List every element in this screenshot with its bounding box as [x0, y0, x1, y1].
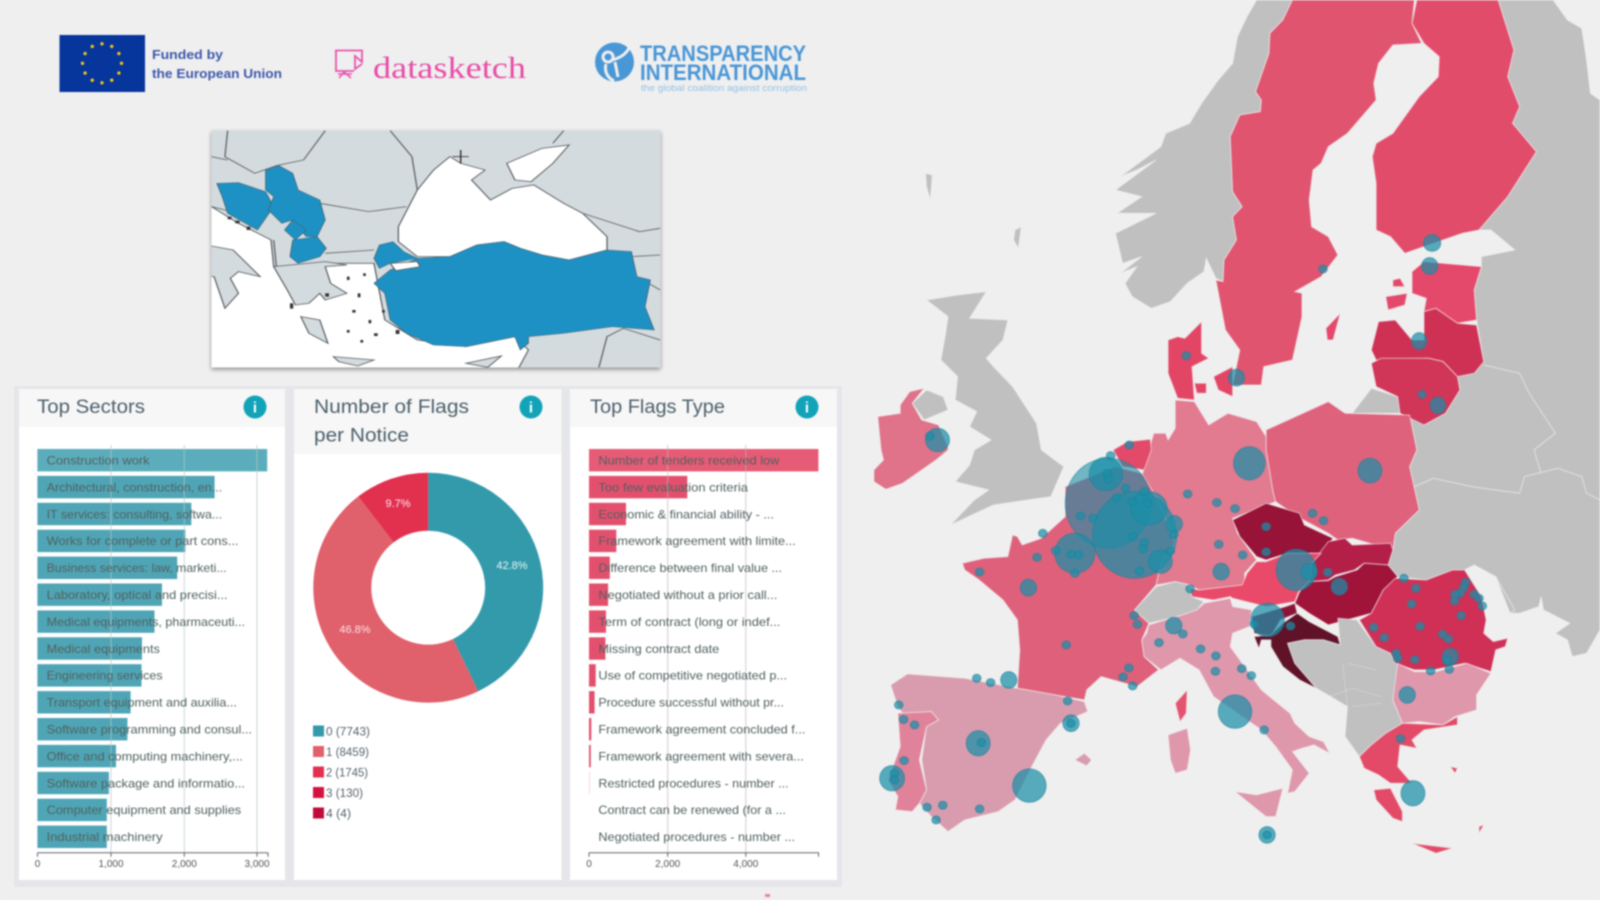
heading: Top Flags Type: Top Flags Type: [590, 397, 725, 418]
bubbles: notices by city, central and southern Europe: [880, 447, 1487, 843]
bar chart: top flag types: Too few evaluation criteria: [598, 480, 748, 494]
icon: info: [244, 396, 266, 418]
legend: flags per notice: 4 (4): [326, 808, 351, 820]
country: Bulgaria: [1393, 663, 1491, 725]
bar chart: top flag types: 4,000: [733, 859, 759, 870]
inset map: Western Balkans and Türkiye: [206, 130, 660, 370]
legend: flags per notice: 1 (8459): [326, 747, 369, 759]
icon: info: i: [529, 400, 533, 416]
dashboard panels background: [14, 386, 842, 887]
bar chart: top sectors: Computer equipment and supplies: [47, 803, 241, 817]
bar chart: top sectors: 2,000: [172, 859, 197, 870]
island: Corsica: [1175, 690, 1187, 722]
bar chart: top sectors: Engineering services: [47, 669, 163, 683]
non-EU countries in grey: [912, 0, 1600, 657]
bar chart: top flag types: Number of tenders received low: [598, 454, 780, 468]
logo: Transparency International: the global coalition against corruption: [641, 83, 807, 94]
map speck: Canary Islands fragment: [765, 894, 770, 897]
country: Austria: [1190, 553, 1321, 607]
bar chart: top sectors: Office and computing machinery,...: [47, 749, 243, 763]
islands: Balearics: [1075, 753, 1092, 766]
bar chart: top flag types: Framework agreement concluded f...: [598, 722, 805, 736]
donut chart: flags per notice: 42.8%: [496, 560, 528, 572]
panel: Top Sectors: [19, 389, 285, 880]
legend: flags per notice: 0 (7743): [326, 726, 370, 738]
country: Switzerland: [1135, 582, 1204, 623]
bar chart: top flag types: Framework agreement with limite...: [598, 534, 796, 548]
country: Denmark: [1168, 322, 1233, 400]
islands: Estonia and Sweden: [1326, 278, 1407, 340]
country: Czechia: [1233, 503, 1333, 560]
bar chart: top sectors: Industrial machinery: [47, 830, 163, 844]
logo: Transparency International: TRANSPARENCY: [640, 41, 806, 66]
legend: flags per notice: 3 (130): [326, 788, 363, 800]
bar chart: top flag types: Use of competitive negotiated p...: [598, 669, 787, 683]
country group: northern Europe: [874, 0, 1536, 590]
bar chart: top sectors: Transport equipment and auxilia...: [47, 696, 237, 710]
islands: Sicily and Sardinia: [1168, 728, 1283, 817]
country: Romania: [1359, 570, 1508, 672]
logo: Funded by the European Union: [60, 35, 282, 92]
bar chart: top flag types: Negotiated without a prior call...: [598, 588, 777, 602]
bar chart: top sectors: Laboratory, optical and precisi...: [47, 588, 228, 602]
bar chart: top sectors: Architectural, construction, en...: [47, 480, 222, 494]
country: Portugal: [888, 712, 938, 812]
bar chart: top flag types: [586, 445, 819, 870]
country: Slovenia: [1252, 603, 1297, 637]
country: Spain: [891, 674, 1088, 832]
bar chart: top sectors: Software package and informatio...: [47, 776, 245, 790]
country: Finland: [1372, 0, 1536, 253]
bar chart: top sectors: Construction work: [47, 454, 151, 468]
country: Ireland: [874, 388, 948, 489]
country group: southern and central Europe: [888, 467, 1508, 853]
country: Poland: [1266, 402, 1419, 550]
countries: Western Balkans: [1288, 618, 1402, 757]
country: Sweden: [1216, 0, 1422, 385]
logo: datasketch: datasketch: [373, 50, 527, 85]
bar chart: top flag types: 2,000: [655, 859, 681, 870]
bar chart: top sectors: Works for complete or part cons...: [47, 534, 238, 548]
bar chart: top flag types: Difference between final value ...: [598, 561, 782, 575]
heading: Top Sectors: Top Sectors: [37, 397, 145, 418]
bubbles: notices by city, northern Europe: [926, 235, 1445, 452]
legend: flags per notice: [313, 726, 370, 820]
country: Greece: [1359, 717, 1484, 853]
bar chart: top sectors: Medical equipments: [47, 642, 160, 656]
donut chart: flags per notice: 46.8%: [339, 624, 371, 636]
bar chart: top flag types: Negotiated procedures - number ...: [598, 830, 795, 844]
panel: Top Flags Type: [570, 389, 837, 880]
country: Latvia: [1371, 308, 1484, 377]
logo: Funded by the European Union: Funded by: [152, 47, 224, 62]
country: Germany: [1142, 400, 1276, 590]
choropleth map: Europe: [874, 0, 1600, 853]
logo: Transparency International: [595, 41, 807, 94]
donut chart: flags per notice: 9.7%: [385, 498, 411, 510]
country: Estonia: [1412, 262, 1481, 323]
country: Lithuania: [1371, 358, 1460, 425]
bar chart: top flag types: Term of contract (long or indef...: [598, 615, 780, 629]
heading: Number of Flags per Notice: [314, 397, 469, 446]
icon: info: i: [253, 400, 257, 416]
bar chart: top flag types: Procedure successful without pr...: [598, 696, 784, 710]
country: France and Belgium: [962, 467, 1175, 700]
donut chart: flags per notice: [313, 473, 543, 703]
icon: info: i: [805, 400, 809, 416]
country: Netherlands: [1113, 439, 1151, 470]
bar chart: top sectors: [35, 445, 270, 870]
icon: info: [796, 396, 818, 418]
country: Slovakia: [1309, 538, 1393, 582]
bar chart: top sectors: Medical equipments, pharmaceuti...: [47, 615, 245, 629]
country: Croatia: [1254, 613, 1340, 688]
bar chart: top flag types: Economic & financial ability - ...: [598, 507, 774, 521]
bar chart: top flag types: 0: [586, 859, 592, 870]
bar chart: top flag types: Missing contract date: [598, 642, 720, 656]
legend: flags per notice: 2 (1745): [326, 768, 368, 780]
country: Hungary: [1295, 563, 1398, 625]
panel: Number of Flags per Notice: [294, 389, 562, 880]
bar chart: top flag types: Restricted procedures - number ...: [598, 776, 789, 790]
bar chart: top sectors: Software programming and consul...: [47, 722, 252, 736]
heading: Number of Flags per Notice: Number of Flags: [314, 397, 469, 418]
icon: info: [520, 396, 542, 418]
heading: Number of Flags per Notice: per Notice: [314, 426, 409, 446]
bar chart: top flag types: Contract can be renewed (for a ...: [598, 803, 786, 817]
logo: datasketch: [335, 50, 527, 85]
bar chart: top flag types: Framework agreement with severa...: [598, 749, 804, 763]
bar chart: top sectors: Business services: law, marketi...: [47, 561, 227, 575]
bar chart: top sectors: 0: [35, 859, 41, 870]
country: Italy: [1142, 598, 1330, 793]
logo: Funded by the European Union: the European Union: [152, 66, 282, 81]
bar chart: top sectors: 1,000: [98, 859, 124, 870]
bar chart: top sectors: IT services: consulting, softwa...: [47, 507, 222, 521]
logo: Transparency International: INTERNATIONAL: [640, 60, 806, 85]
bar chart: top sectors: 3,000: [244, 859, 270, 870]
